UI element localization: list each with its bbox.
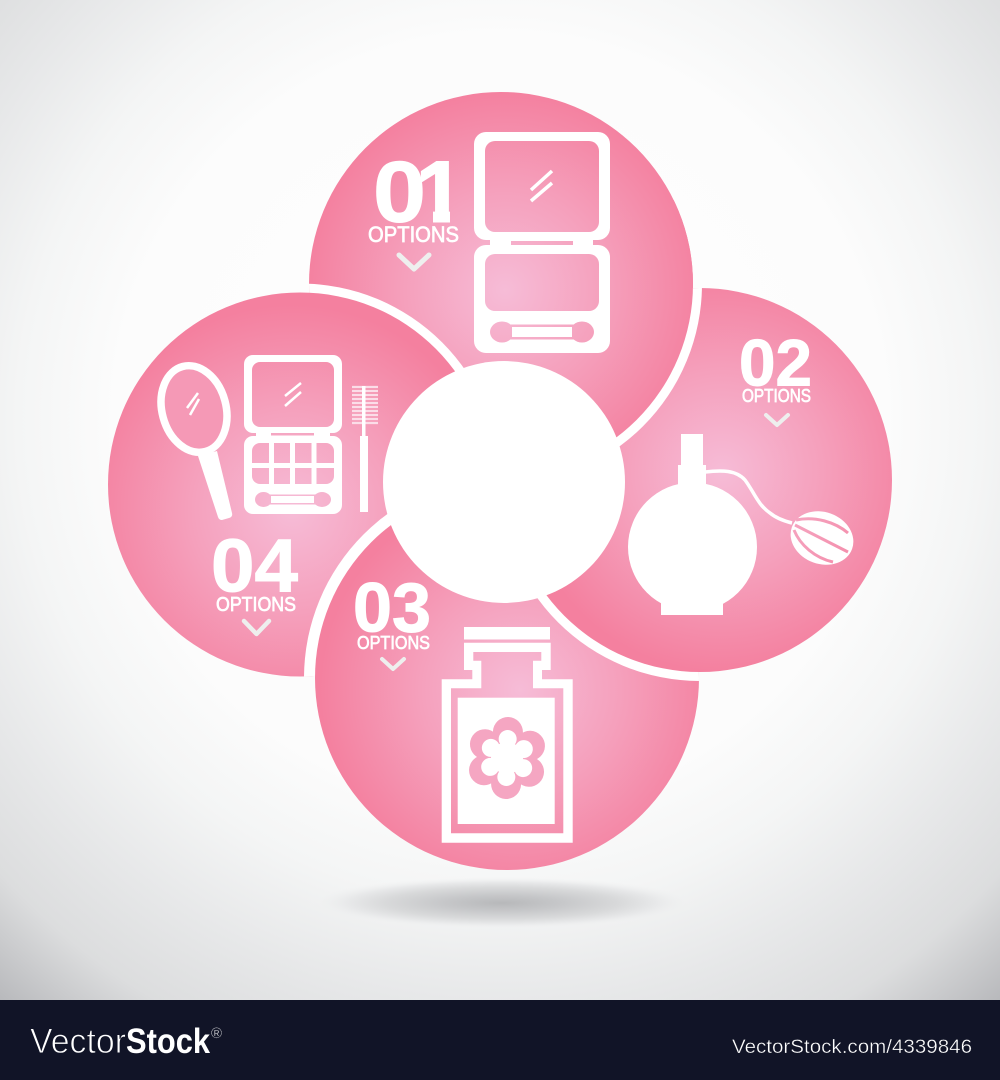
icon: perfume atomizer <box>628 434 861 615</box>
footer logo: Stock <box>126 1022 210 1061</box>
label: 01 options <box>368 160 458 272</box>
footer image id: VectorStock.com/4339846 <box>732 1036 972 1058</box>
icon: eyeshadow compact large <box>474 132 610 353</box>
panel: circle 01 <box>309 92 693 476</box>
label: 02 options: OPTIONS <box>742 386 811 406</box>
footer bar <box>0 1000 1000 1080</box>
icon: mascara brush <box>352 386 378 512</box>
panel: circle 01 overlap on circle 02 <box>544 200 702 446</box>
footer logo: ® <box>211 1025 222 1042</box>
label: 04 options: OPTIONS <box>216 594 296 616</box>
panel: circle 04 <box>108 284 464 676</box>
label: 04 options: 04 <box>211 524 298 608</box>
label: 01 options: OPTIONS <box>368 222 459 247</box>
drop shadow <box>308 877 696 929</box>
icon: hand mirror <box>152 358 236 520</box>
panel: circle 03 <box>304 514 699 870</box>
icon: perfume bottle with flower <box>442 627 573 843</box>
label: 01 options: 0 <box>373 144 426 240</box>
icon: eyeshadow palette small <box>244 355 342 514</box>
footer logo: Vector <box>30 1022 126 1061</box>
label: 03 options: OPTIONS <box>357 632 430 653</box>
footer logo <box>30 1022 222 1061</box>
label: 03 options: 03 <box>353 568 431 646</box>
label: 01 options: 1 <box>416 144 464 240</box>
center white circle <box>383 361 625 603</box>
panel: circle 02 <box>538 288 892 681</box>
label: 02 options: 02 <box>739 326 812 400</box>
